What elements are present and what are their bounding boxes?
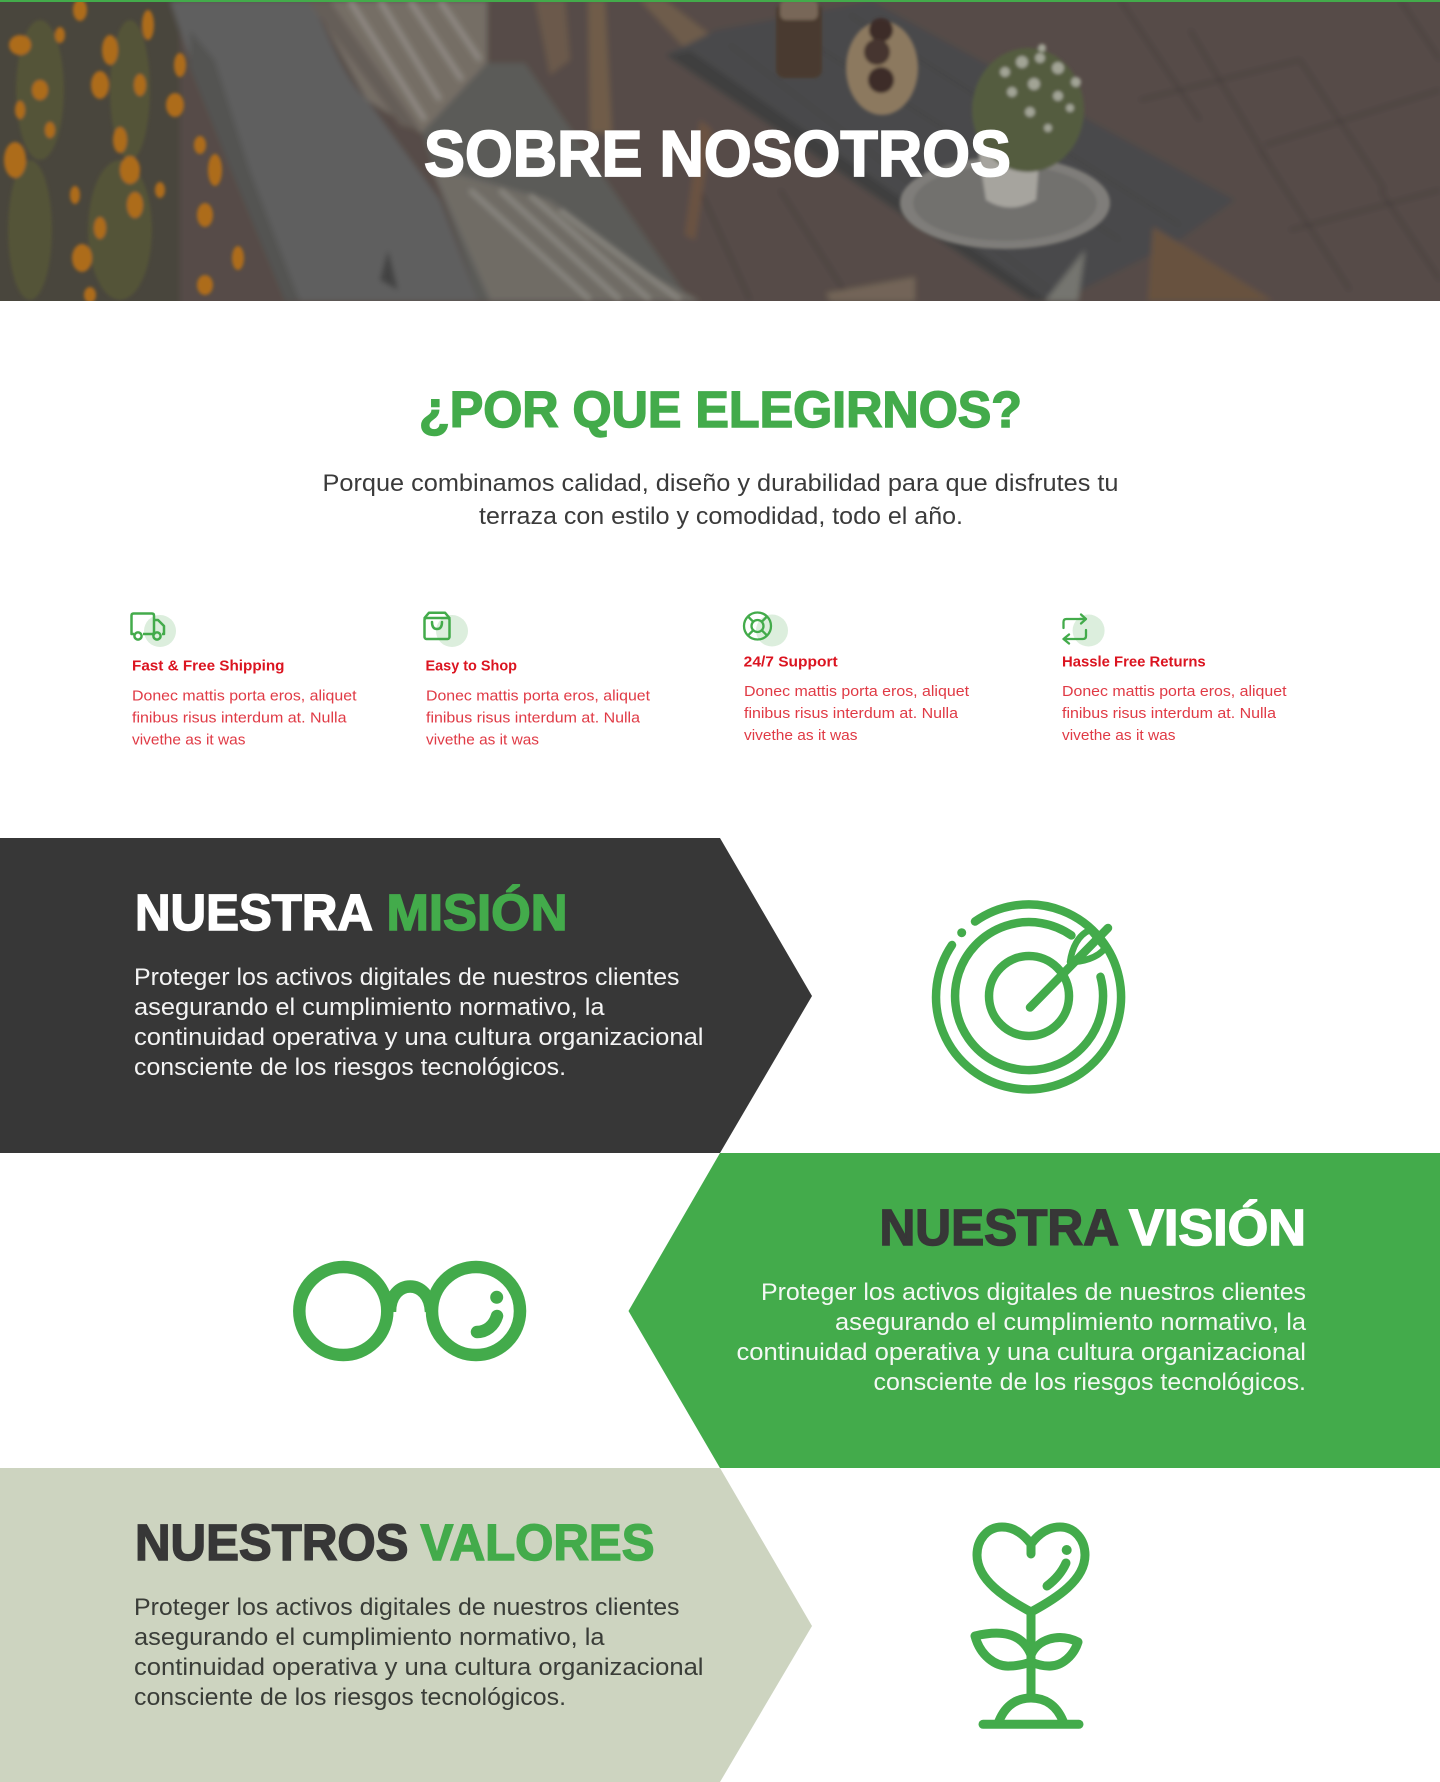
hero banner	[0, 0, 1440, 310]
arrow background	[628, 1153, 1440, 1468]
paragraph: asegurando el cumplimiento normativo, la	[835, 1309, 1307, 1336]
icon: glasses	[299, 1267, 520, 1355]
icon: truck	[132, 614, 176, 647]
icon: target with dart	[936, 904, 1121, 1089]
feature text	[1062, 684, 1286, 744]
paragraph: Proteger los activos digitales de nuestros clientes	[134, 1594, 680, 1621]
feature text: finibus risus interdum at. Nulla	[132, 710, 348, 726]
feature text: finibus risus interdum at. Nulla	[426, 710, 641, 726]
feature title: Fast & Free Shipping	[132, 658, 284, 674]
feature text: Donec mattis porta eros, aliquet	[132, 688, 356, 704]
icon: return arrows	[1064, 614, 1105, 646]
jar and tray	[776, 3, 822, 78]
feature text: finibus risus interdum at. Nulla	[744, 706, 959, 722]
feature text	[744, 684, 969, 744]
feature title: Easy to Shop	[426, 658, 517, 674]
panel: vision	[628, 1153, 1440, 1468]
section heading: por que elegirnos: ¿POR QUE ELEGIRNOS?	[419, 381, 1022, 438]
arrow background	[0, 1468, 812, 1782]
flower bouquet	[972, 48, 1084, 172]
heading: MISIÓN	[386, 884, 568, 941]
feature text: vivethe as it was	[132, 732, 246, 748]
intro paragraph: Porque combinamos calidad, diseño y durabilidad para que disfrutes tu	[322, 470, 1118, 497]
heading: NUESTROS	[135, 1514, 408, 1571]
heading: NUESTRA	[880, 1199, 1119, 1256]
paragraph: asegurando el cumplimiento normativo, la	[134, 1624, 605, 1651]
feature text: vivethe as it was	[426, 732, 539, 748]
lower striped pillow	[430, 166, 700, 301]
icon: lifebuoy	[744, 612, 788, 646]
arrow background	[0, 838, 812, 1153]
paragraph: consciente de los riesgos tecnológicos.	[134, 1684, 566, 1711]
feature: fast and free shipping	[132, 614, 356, 748]
icon: shopping bag	[424, 613, 468, 647]
intro paragraph: terraza con estilo y comodidad, todo el año.	[479, 503, 963, 530]
overlay	[0, 0, 1440, 301]
heading	[135, 884, 568, 941]
feature title: 24/7 Support	[744, 654, 838, 670]
heading	[880, 1199, 1306, 1256]
feature text: vivethe as it was	[1062, 728, 1176, 744]
seat cushion	[422, 63, 690, 301]
feature: easy to shop	[424, 613, 650, 748]
paragraph	[134, 964, 704, 1081]
paragraph	[736, 1279, 1307, 1396]
placemat and pot	[900, 157, 1110, 249]
hero title: SOBRE NOSOTROS	[424, 117, 1011, 190]
low table	[666, 1, 1235, 301]
feature text	[426, 688, 650, 748]
sofa arm	[170, 1, 478, 301]
feature text: Donec mattis porta eros, aliquet	[1062, 684, 1286, 700]
feature: 24/7 support	[744, 612, 969, 744]
panel: mision	[0, 838, 812, 1153]
heading: NUESTRA	[135, 884, 373, 941]
feature: hassle free returns	[1062, 614, 1286, 744]
heading: VISIÓN	[1129, 1199, 1306, 1256]
hero photo: terrace furniture	[0, 0, 1440, 310]
paragraph: Proteger los activos digitales de nuestros clientes	[134, 964, 680, 991]
paragraph: continuidad operativa y una cultura organizacional	[736, 1339, 1306, 1366]
top green line	[0, 0, 1440, 2]
paragraph: consciente de los riesgos tecnológicos.	[134, 1054, 566, 1081]
paragraph	[134, 1594, 704, 1711]
paragraph: continuidad operativa y una cultura organizacional	[134, 1024, 704, 1051]
panel: valores	[0, 1468, 812, 1782]
intro paragraph	[322, 470, 1118, 530]
feature text: finibus risus interdum at. Nulla	[1062, 706, 1277, 722]
feature text: Donec mattis porta eros, aliquet	[744, 684, 969, 700]
feature text: vivethe as it was	[744, 728, 858, 744]
left flowers	[4, 0, 244, 303]
heading: VALORES	[420, 1514, 654, 1571]
heading	[135, 1514, 654, 1571]
feature title: Hassle Free Returns	[1062, 654, 1206, 670]
paragraph: consciente de los riesgos tecnológicos.	[874, 1369, 1306, 1396]
upper striped pillow	[312, 1, 487, 133]
feature text	[132, 688, 356, 748]
feature text: Donec mattis porta eros, aliquet	[426, 688, 650, 704]
paragraph: asegurando el cumplimiento normativo, la	[134, 994, 605, 1021]
icon: heart plant	[975, 1527, 1085, 1724]
bottom wood	[1148, 227, 1273, 301]
paragraph: continuidad operativa y una cultura organizacional	[134, 1654, 704, 1681]
paragraph: Proteger los activos digitales de nuestros clientes	[761, 1279, 1306, 1306]
chair wood	[588, 0, 612, 133]
